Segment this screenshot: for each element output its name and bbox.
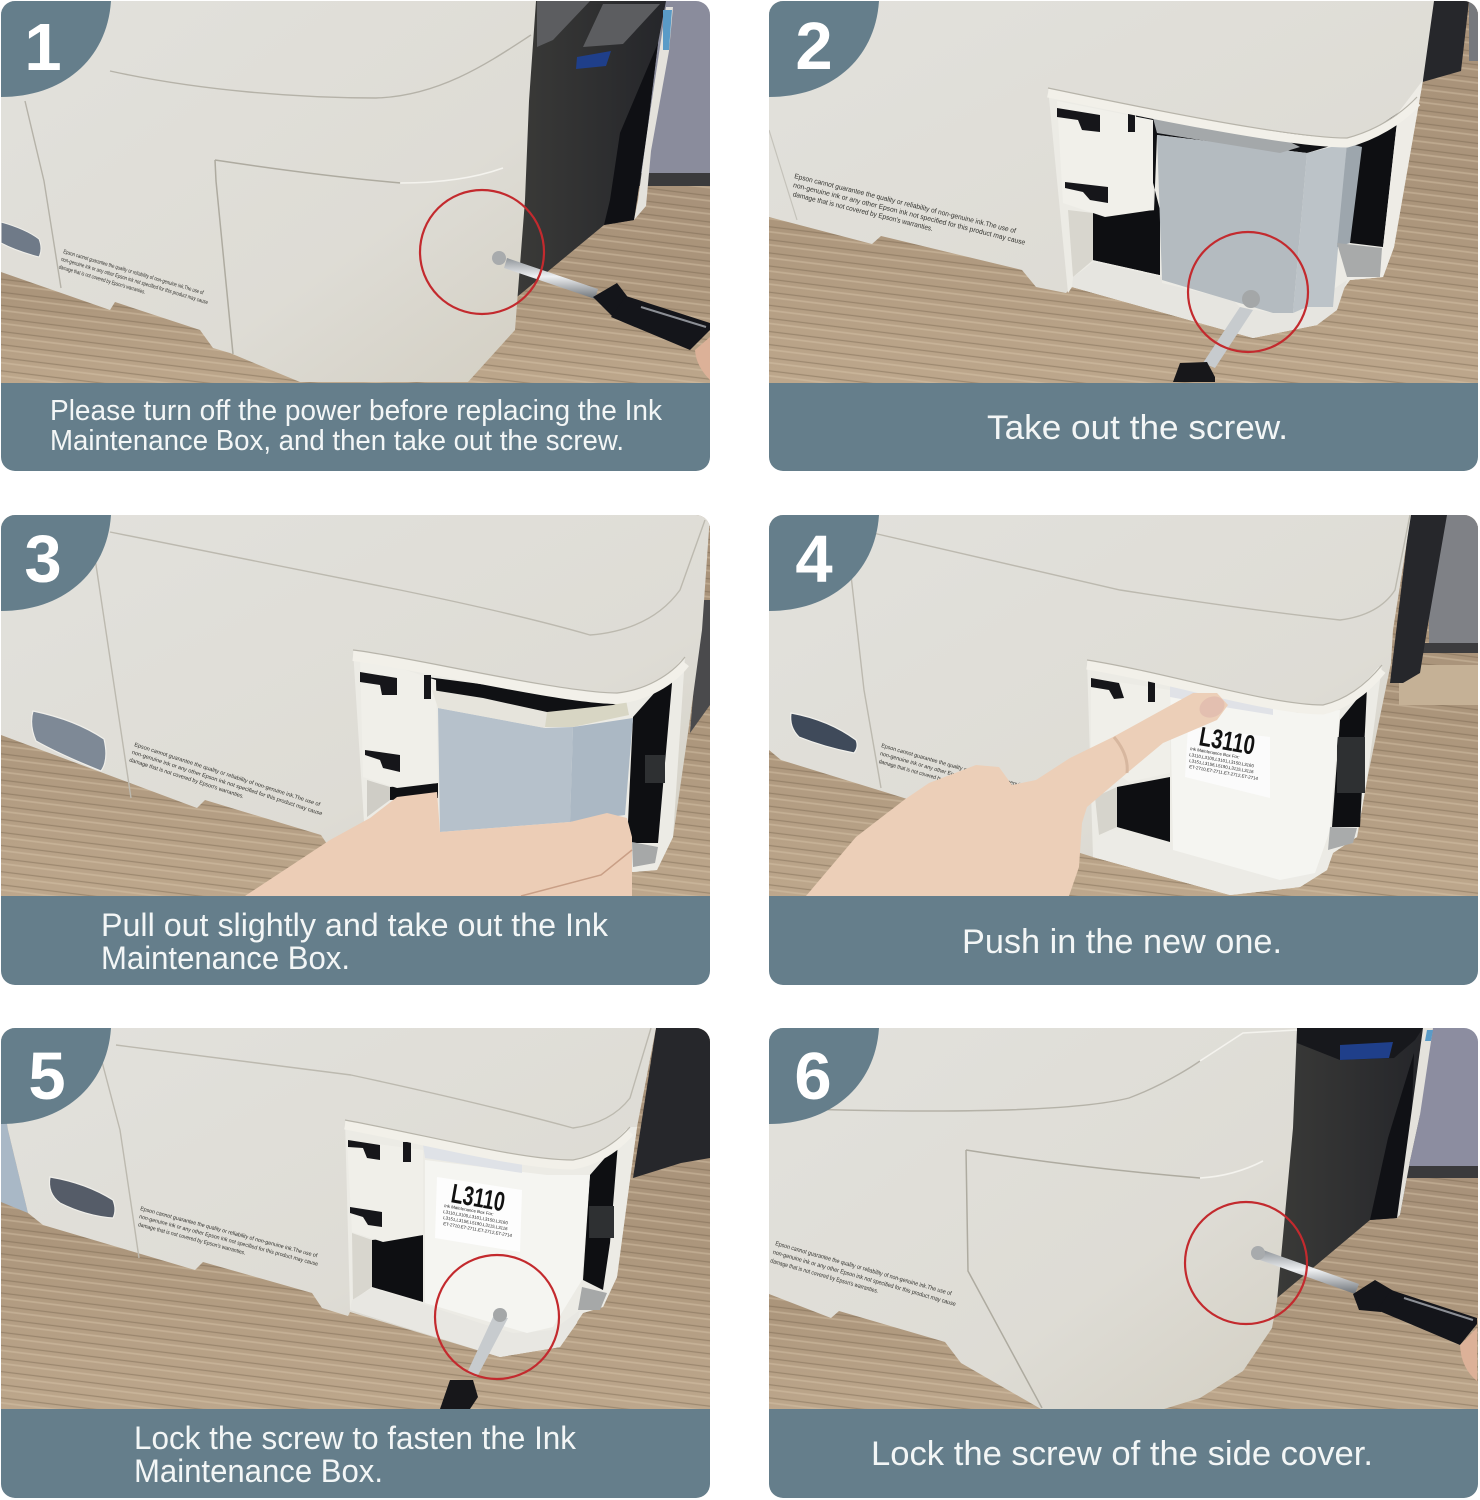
caption 2 <box>769 383 1478 471</box>
printed warning text: damage that is not covered by Epson's warranties. <box>769 1258 879 1295</box>
compartment frame <box>1087 660 1382 895</box>
caption 1: Maintenance Box, and then take out the screw. <box>50 425 624 457</box>
icon: red highlight circle <box>435 1255 559 1379</box>
printer rear dark body <box>1277 1028 1433 1298</box>
panel: step 6 <box>769 1028 1478 1498</box>
hands <box>245 792 632 896</box>
caption 6 <box>769 1409 1478 1498</box>
caption 5: Maintenance Box. <box>134 1453 383 1489</box>
caption 4: Push in the new one. <box>962 923 1282 961</box>
printer side body <box>1 1 536 382</box>
L3110 label: Ink Maintenance Box For: <box>1190 746 1240 760</box>
slot <box>49 1177 115 1218</box>
interior black areas <box>1093 113 1398 275</box>
L3110 label: L3110,L3100,L3101,L3150,L3160 <box>1189 752 1255 768</box>
new white ink box <box>423 1145 590 1333</box>
hinge block <box>1057 101 1153 277</box>
L3110 label: L3110,L3100,L3101,L3150,L3160 <box>443 1209 509 1225</box>
caption 5: Lock the screw to fasten the Ink <box>134 1420 577 1456</box>
slot <box>32 711 106 771</box>
step number badge 6: 6 <box>794 1039 832 1114</box>
printer body <box>769 1 1434 338</box>
step number badge 2 <box>769 1 879 97</box>
side cover <box>215 160 401 354</box>
icon: red highlight circle <box>1188 232 1308 352</box>
icon: red highlight circle <box>1185 1202 1307 1324</box>
interior black areas <box>1117 687 1367 842</box>
new white ink box <box>1170 685 1340 880</box>
printed warning text: damage that is not covered by Epson's warranties. <box>128 757 245 800</box>
panel: step 4 <box>769 515 1478 985</box>
panel: step 1 <box>1 1 710 471</box>
caption 3: Maintenance Box. <box>101 940 350 976</box>
L3110 label: L3151,L3156,L5190,L3115,L3116 <box>1189 758 1255 774</box>
printer body <box>1 1028 656 1357</box>
printer side body <box>769 1028 1297 1409</box>
slot <box>791 713 857 753</box>
step number badge 5: 5 <box>28 1039 66 1114</box>
gray bottom <box>1328 827 1357 850</box>
L3110 label: ET-2710,ET-2711,ET-2712,ET-2714 <box>1189 764 1259 781</box>
printed warning text: non-genuine ink or any other Epson ink not specified for this product may cause <box>131 750 323 817</box>
icon: screwdriver <box>492 251 710 350</box>
base tray <box>1093 830 1330 895</box>
base tray <box>1072 287 1344 338</box>
step number badge 5 <box>1 1028 111 1124</box>
printed warning text: damage that is not covered by Epson's warranties. <box>792 191 934 233</box>
printed warning text: Epson cannot guarantee the quality or reliability of non-genuine ink.The use of <box>774 1241 952 1297</box>
slot <box>1 222 41 257</box>
printed warning text: Epson cannot guarantee the quality or reliability of non-genuine ink.The use of <box>133 742 321 808</box>
L3110 label: ET-2710,ET-2711,ET-2712,ET-2714 <box>443 1221 513 1238</box>
caption 1 <box>1 383 710 471</box>
L3110 label: L3151,L3156,L5190,L3115,L3116 <box>443 1215 509 1231</box>
L3110 label: Ink Maintenance Box For: <box>444 1203 494 1217</box>
side cover <box>966 1150 1200 1408</box>
printer rear dark body <box>517 1 673 297</box>
caption 2: Take out the screw. <box>987 409 1288 447</box>
printed warning text: non-genuine ink or any other Epson ink not specified for this product may cause <box>772 1250 957 1308</box>
right frame <box>1347 80 1423 280</box>
step number badge 3 <box>1 515 111 611</box>
caption 3 <box>1 896 710 985</box>
L3110 label <box>435 1177 522 1252</box>
step number badge 6 <box>769 1028 879 1124</box>
caption 6: Lock the screw of the side cover. <box>871 1435 1373 1473</box>
step number badge 1: 1 <box>24 10 62 85</box>
L3110 label: L3110 <box>449 1178 507 1217</box>
icon: fingertip <box>695 337 710 380</box>
step number badge 4 <box>769 515 879 611</box>
caption 4 <box>769 896 1478 985</box>
lid edge <box>353 650 685 699</box>
printed warning text: damage that is not covered by Epson's warranties. <box>137 1222 246 1257</box>
base tray <box>350 1288 580 1357</box>
compartment frame <box>353 650 685 872</box>
printed warning text: non-genuine ink or any other Epson ink not specified for this product may cause <box>60 257 209 306</box>
compartment frame <box>1048 88 1417 338</box>
panel: step 5 <box>1 1028 710 1498</box>
printer body <box>769 515 1411 895</box>
printed warning text <box>58 249 208 304</box>
icon: red highlight circle <box>420 190 544 314</box>
lid edge <box>1087 660 1382 710</box>
lid edge <box>345 1120 630 1165</box>
panel: step 3 <box>1 515 710 985</box>
printed warning text: damage that is not covered by Epson's warranties. <box>58 265 146 296</box>
gray bottom <box>632 842 658 867</box>
printed warning text: damage that is not covered by Epson's warranties. <box>878 759 986 795</box>
step number badge 3: 3 <box>24 522 62 597</box>
icon: screwdriver <box>1251 1246 1477 1345</box>
interior black areas <box>372 1143 618 1302</box>
icon: screwdriver <box>440 1308 508 1409</box>
printed warning text: non-genuine ink or any other Epson ink not specified for this product may cause <box>879 751 1063 809</box>
printed warning text: Epson cannot guarantee the quality or reliability of non-genuine ink.The use of <box>139 1206 318 1259</box>
step number badge 1 <box>1 1 111 97</box>
printed warning text: non-genuine ink or any other Epson ink not specified for this product may cause <box>138 1214 319 1268</box>
icon: fingertip <box>1460 1328 1477 1381</box>
icon: screwdriver <box>1173 290 1260 382</box>
printed warning text: Epson cannot guarantee the quality or reliability of non-genuine ink.The use of <box>62 249 204 296</box>
hinge block <box>347 1140 423 1300</box>
caption 5 <box>1 1409 710 1498</box>
gray bottom <box>578 1287 607 1310</box>
L3110 label: L3110 <box>1197 721 1257 761</box>
hand pointing <box>806 692 1228 896</box>
caption 3: Pull out slightly and take out the Ink <box>101 907 609 943</box>
L3110 label <box>1185 721 1270 798</box>
printed warning text: non-genuine ink or any other Epson ink not specified for this product may cause <box>792 182 1026 247</box>
gray ink box <box>432 690 633 832</box>
hinge block <box>1091 678 1170 835</box>
printed warning text: Epson cannot guarantee the quality or reliability of non-genuine ink.The use of <box>794 173 1016 235</box>
interior black areas <box>390 672 673 843</box>
hinge block <box>360 672 438 817</box>
gray ink box <box>1153 118 1382 313</box>
printed warning text: Epson cannot guarantee the quality or reliability of non-genuine ink.The use of <box>880 743 1060 800</box>
panel: step 2 <box>769 1 1478 471</box>
step number badge 4: 4 <box>795 522 833 597</box>
caption 1: Please turn off the power before replacing the Ink <box>50 395 662 427</box>
lid edge <box>1048 88 1417 143</box>
compartment frame <box>345 1120 637 1357</box>
step number badge 2: 2 <box>795 9 833 84</box>
printer body <box>1 515 710 872</box>
